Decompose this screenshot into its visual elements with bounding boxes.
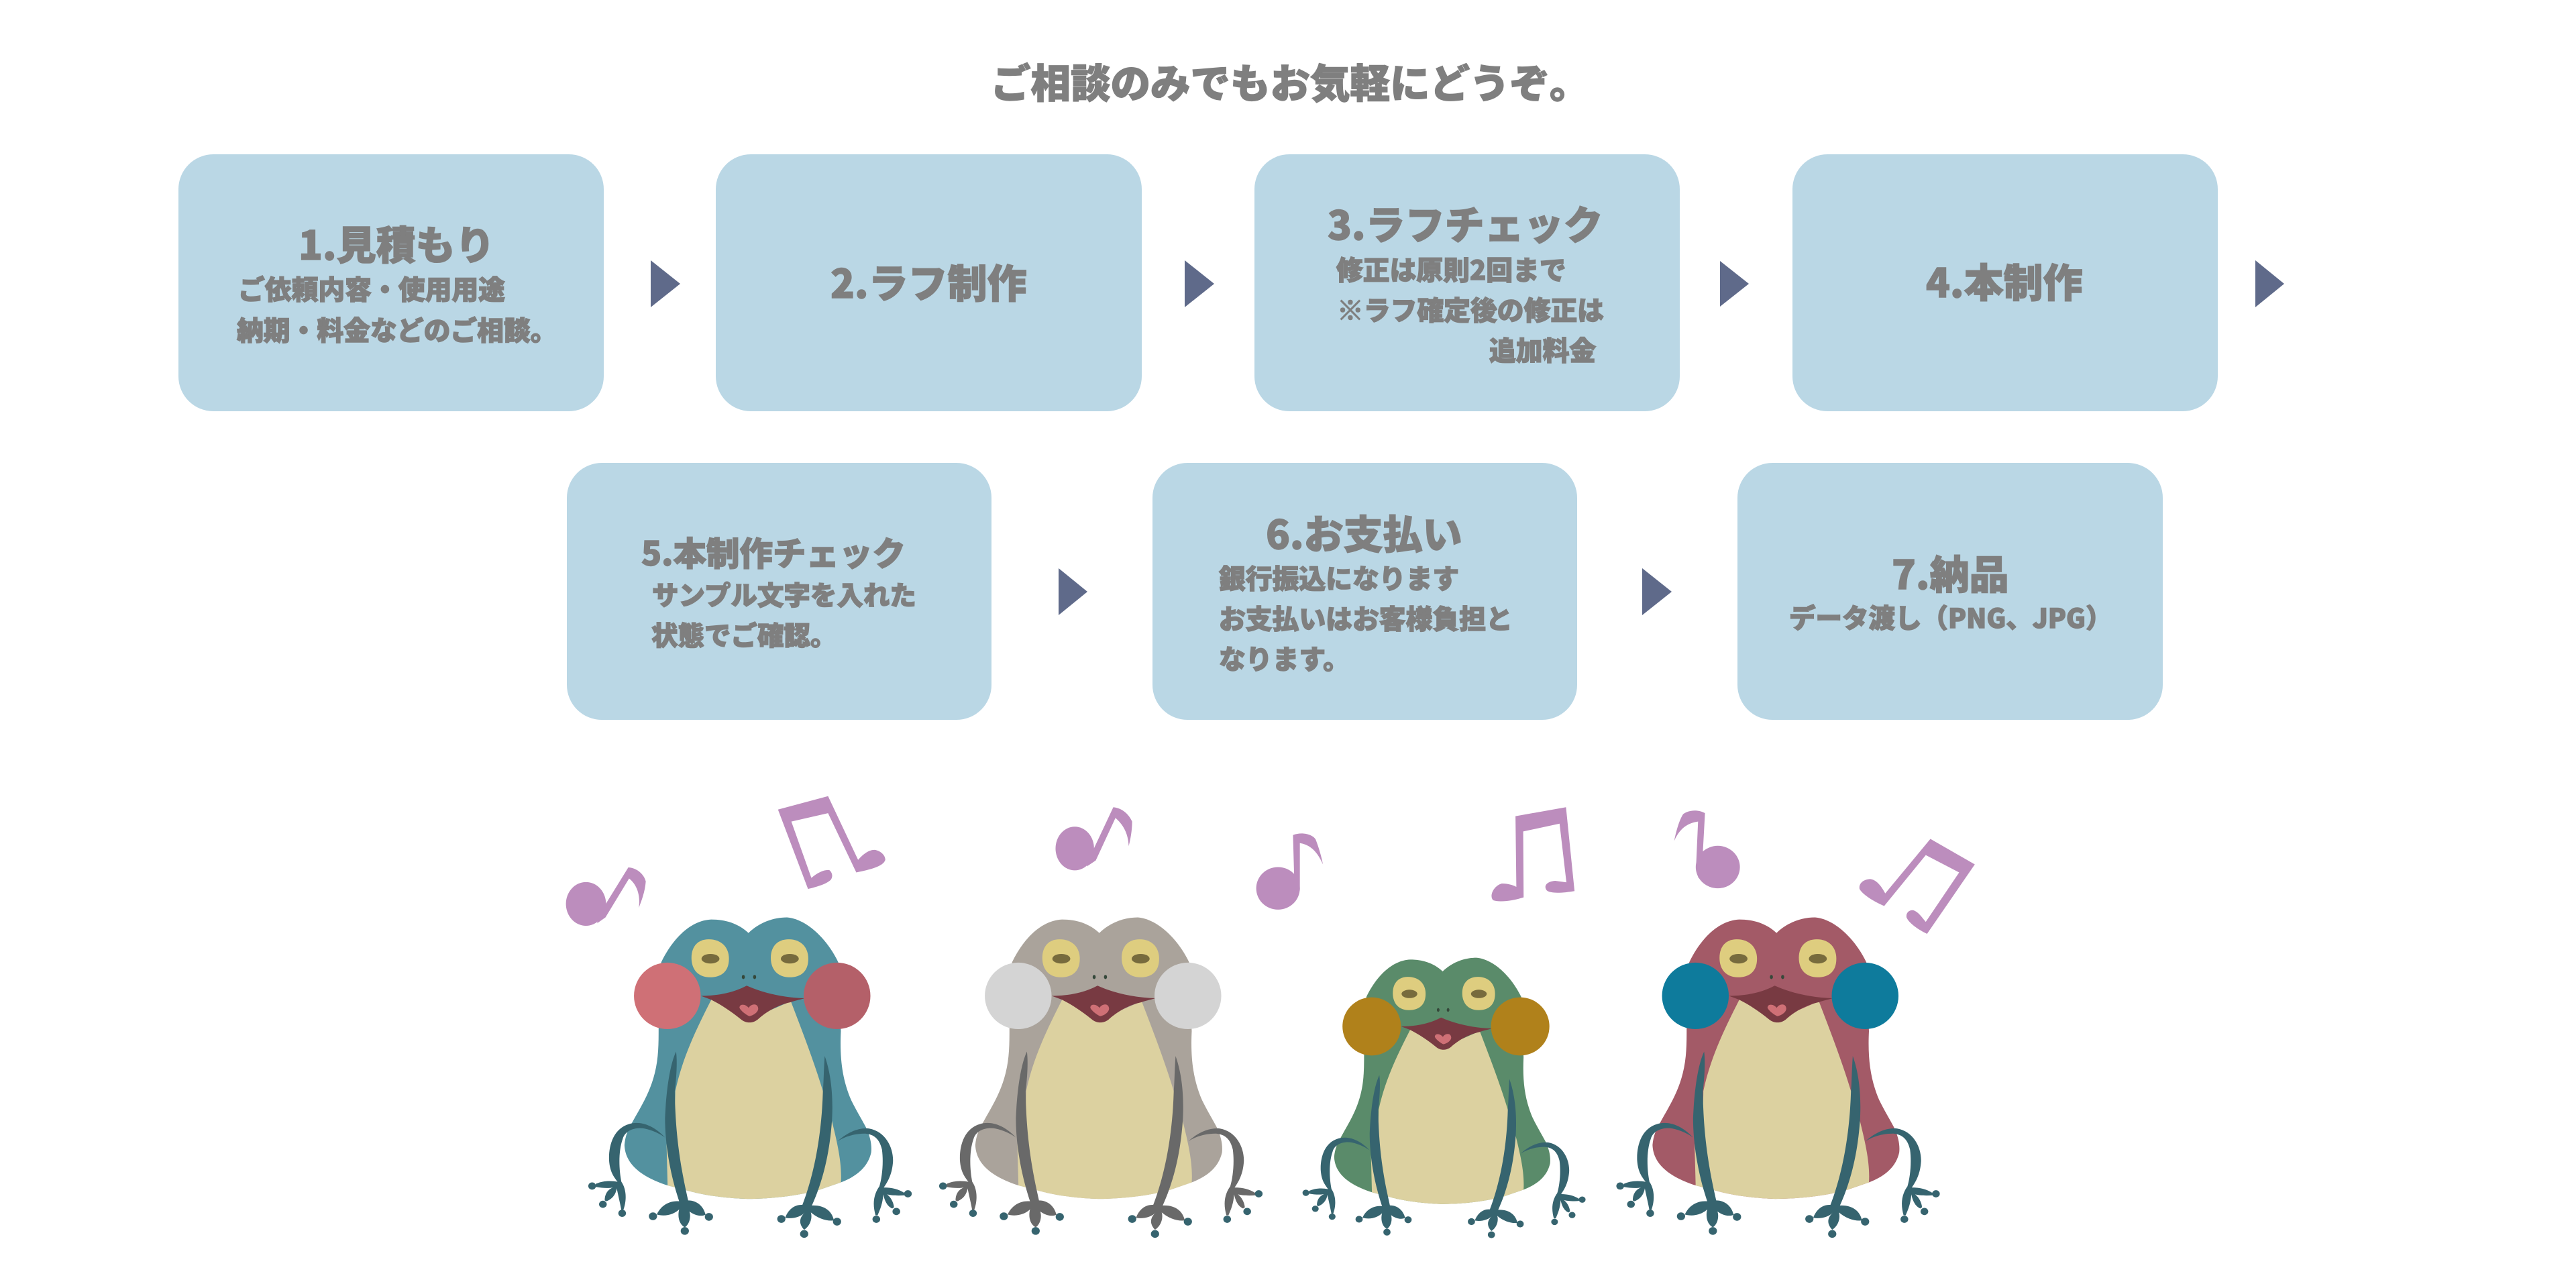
gray frog eyes bbox=[1042, 939, 1159, 979]
icon: music note 2 bbox=[778, 796, 885, 889]
gray frog belly bbox=[1017, 1000, 1192, 1199]
green frog limbs bbox=[1309, 1075, 1579, 1231]
icon: music note 4 bbox=[1256, 833, 1323, 910]
blue frog eyes bbox=[692, 939, 808, 979]
step 6 description bbox=[1219, 558, 1513, 677]
step 4 heading: 4.本制作 bbox=[1926, 252, 2083, 309]
red frog left cheek bbox=[1662, 963, 1729, 1029]
red frog toes bbox=[1616, 1183, 1940, 1238]
panel: step 1 bbox=[178, 154, 604, 411]
blue frog belly bbox=[666, 1000, 841, 1199]
red frog belly bbox=[1695, 1000, 1869, 1199]
green frog body bbox=[1334, 958, 1550, 1204]
green frog toes bbox=[1303, 1189, 1586, 1238]
step 5 description bbox=[651, 575, 916, 653]
step 3 description: ※ラフ確定後の修正は bbox=[1337, 290, 1604, 328]
arrow 6 bbox=[1642, 568, 1672, 615]
step 2 heading: 2.ラフ制作 bbox=[830, 252, 1027, 309]
gray frog toes bbox=[939, 1183, 1263, 1238]
step 6 description: お支払いはお客様負担と bbox=[1219, 598, 1513, 637]
blue frog left cheek bbox=[634, 963, 701, 1029]
green frog belly bbox=[1371, 1030, 1523, 1204]
step 3 heading: 3.ラフチェック bbox=[1328, 194, 1603, 251]
green frog right cheek bbox=[1491, 998, 1550, 1055]
icon: music note 3 bbox=[1055, 807, 1132, 870]
panel: step 3 bbox=[1254, 154, 1680, 411]
step 3 description bbox=[1336, 250, 1604, 368]
step 6 heading: 6.お支払い bbox=[1266, 503, 1462, 560]
panel: step 4 bbox=[1792, 154, 2218, 411]
blue frog toes bbox=[588, 1183, 912, 1238]
blue frog right cheek bbox=[804, 963, 871, 1029]
green frog mouth bbox=[1401, 1018, 1492, 1050]
red frog limbs bbox=[1624, 1051, 1933, 1230]
title: ご相談のみでもお気軽にどうぞ。 bbox=[991, 52, 1590, 110]
panel: step 7 bbox=[1737, 463, 2163, 720]
gray frog right cheek bbox=[1155, 963, 1222, 1029]
icon: music note 6 bbox=[1674, 810, 1740, 888]
step 6 description: 銀行振込になります bbox=[1219, 558, 1459, 596]
arrow 4 bbox=[2255, 260, 2284, 307]
blue frog mouth bbox=[701, 985, 805, 1022]
icon: music note 5 bbox=[1491, 807, 1574, 901]
frog: gray bbox=[939, 917, 1263, 1238]
frog: red bbox=[1616, 917, 1940, 1238]
step 1 description bbox=[237, 269, 557, 348]
green frog left cheek bbox=[1342, 998, 1401, 1055]
step 7 description: データ渡し（PNG、JPG） bbox=[1789, 598, 2112, 636]
gray frog limbs bbox=[947, 1051, 1255, 1230]
blue frog limbs bbox=[596, 1051, 904, 1230]
icon: music note 7 bbox=[1860, 839, 1975, 934]
step 5 heading: 5.本制作チェック bbox=[641, 528, 906, 576]
gray frog mouth bbox=[1052, 985, 1156, 1022]
arrow 2 bbox=[1185, 260, 1214, 307]
icon: music note 1 bbox=[566, 867, 646, 926]
red frog eyes bbox=[1719, 939, 1836, 979]
arrow 5 bbox=[1059, 568, 1087, 615]
red frog body bbox=[1652, 917, 1899, 1199]
step 5 description: サンプル文字を入れた bbox=[652, 575, 916, 613]
step 3 description: 追加料金 bbox=[1489, 330, 1596, 368]
blue frog body bbox=[625, 917, 871, 1199]
gray frog body bbox=[975, 917, 1222, 1199]
green frog eyes bbox=[1393, 977, 1495, 1012]
step 3 description: 修正は原則2回まで bbox=[1336, 250, 1566, 288]
step 6 description: なります。 bbox=[1219, 639, 1350, 677]
step 7 heading: 7.納品 bbox=[1892, 543, 2009, 600]
step 1 description: 納期・料金などのご相談。 bbox=[237, 310, 557, 348]
step 5 description: 状態でご確認。 bbox=[651, 615, 837, 653]
arrow 1 bbox=[651, 260, 680, 307]
red frog mouth bbox=[1729, 985, 1833, 1022]
arrow 3 bbox=[1720, 261, 1749, 307]
step 1 heading: 1.見積もり bbox=[299, 214, 495, 271]
step 1 description: ご依頼内容・使用用途 bbox=[238, 269, 505, 307]
panel: step 2 bbox=[716, 154, 1142, 411]
gray frog left cheek bbox=[985, 963, 1052, 1029]
panel: step 6 bbox=[1152, 463, 1577, 720]
red frog right cheek bbox=[1832, 963, 1898, 1029]
frog: green bbox=[1303, 958, 1586, 1238]
panel: step 5 bbox=[567, 463, 991, 720]
frog: blue bbox=[588, 917, 912, 1238]
